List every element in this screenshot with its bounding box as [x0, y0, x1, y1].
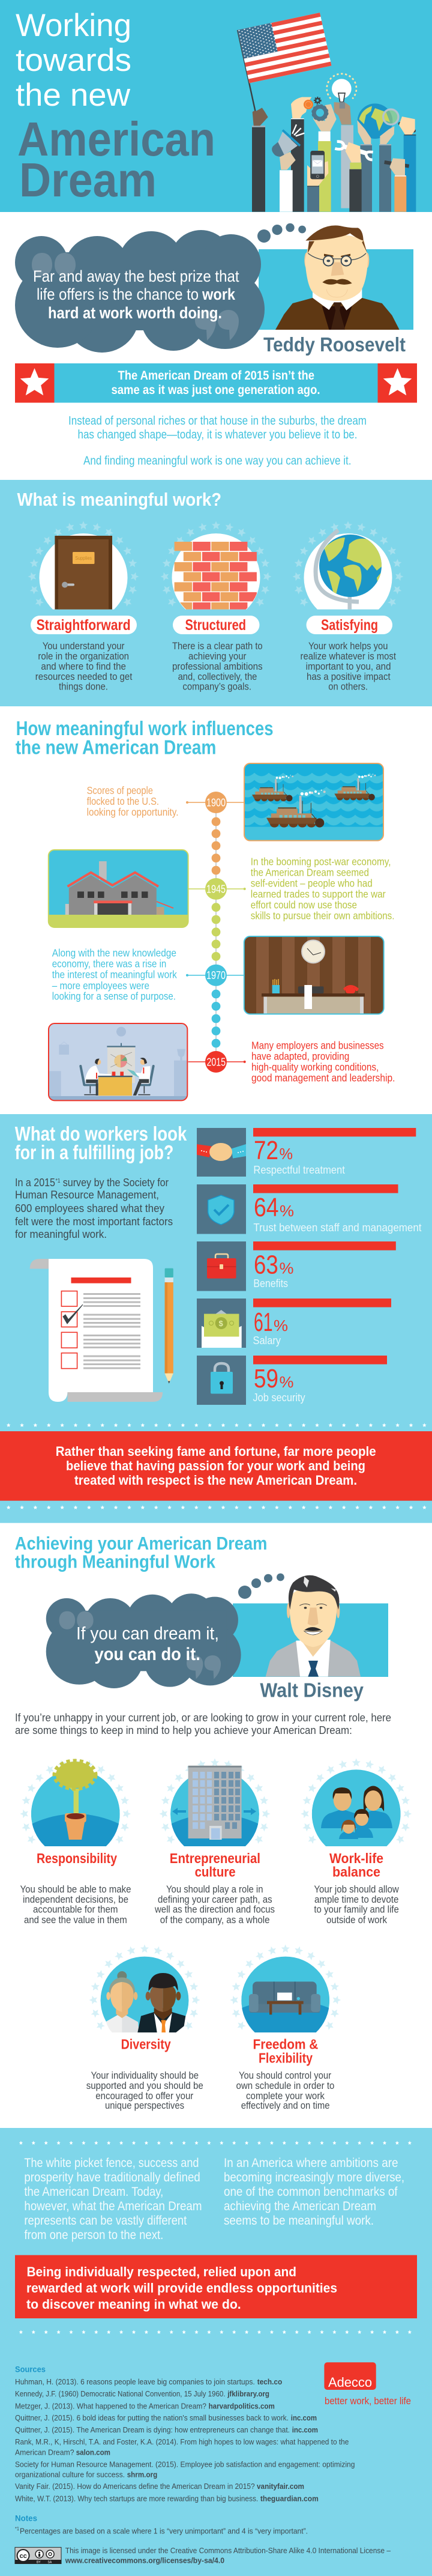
card: straightforward [28, 521, 139, 692]
card: satisfying [293, 521, 403, 692]
text: learned trades to support the war [251, 888, 386, 900]
stat: salary: 61 [254, 1308, 272, 1337]
body text: Your work helps you [308, 640, 388, 652]
label [253, 2037, 318, 2066]
text: Along with the new knowledge [52, 947, 176, 959]
badge: creative commons: SA [48, 2561, 52, 2565]
label pill: Straightforward [37, 617, 131, 634]
star ring [28, 521, 139, 608]
panel: header [0, 0, 432, 212]
icon: potted tree [31, 1759, 120, 1846]
text: left column: however, what the American Dream [24, 2199, 202, 2213]
left person [80, 1059, 111, 1096]
title: the new [16, 77, 131, 113]
label: Entrepreneurial [170, 1850, 260, 1866]
heading: through Meaningful Work [15, 1551, 216, 1572]
icon: globe [316, 530, 384, 610]
text: economy, there was a rise in [52, 958, 166, 970]
name: Walt Disney: Walt Disney [260, 1679, 364, 1701]
text: right column: one of the common benchmarks of [224, 2185, 398, 2199]
notes [15, 2513, 308, 2536]
stat: trust: Trust between staff and management [253, 1221, 421, 1234]
body text: resources needed to get [35, 671, 133, 682]
arm: wrench [335, 142, 373, 212]
body text: Your job should allow [314, 1884, 399, 1895]
arm: globe [357, 103, 398, 212]
icon: family [312, 1769, 401, 1846]
portrait: Teddy Roosevelt [275, 225, 400, 330]
body text: of the company, as a whole [160, 1915, 270, 1926]
sources: Society for Human Resource Management. (2015). Employee job satisfaction and engagement: optimizing [15, 2460, 355, 2468]
body text [300, 640, 396, 692]
notes: Notes [15, 2513, 37, 2523]
text: self-evident – people who had [251, 877, 373, 889]
stat: job security [197, 1356, 387, 1405]
text: the American Dream seemed [251, 866, 369, 878]
title: Dream [19, 153, 157, 207]
label: Responsibility [37, 1850, 117, 1866]
icon: pencil [165, 1268, 173, 1384]
stat: trust: 64 [254, 1193, 279, 1222]
body text: things done. [59, 681, 108, 692]
survey paragraph: In a 2015 [15, 1176, 55, 1189]
icon: door [55, 536, 112, 610]
dots: 1970-2015 [212, 990, 220, 1047]
sources: White, W.T. (2013). Why tech startups are more rewarding than big business. [15, 2494, 258, 2503]
license text [65, 2546, 391, 2565]
stars row top [7, 1423, 427, 1427]
intro paragraph [68, 414, 367, 467]
sources: inc.com [291, 2413, 317, 2422]
survey paragraph: survey by the Society for [63, 1176, 169, 1189]
label: Freedom & [253, 2037, 318, 2052]
body text: on others. [328, 681, 368, 692]
notes: *1 [15, 2526, 20, 2532]
sources: jfklibrary.org [227, 2389, 269, 2398]
sources: Quittner, J. (2015). 6 bold ideas for putting the nation's small businesses back to work. [15, 2413, 289, 2422]
text: right column: achieving the American Dream [224, 2199, 376, 2213]
thought bubbles [257, 223, 306, 243]
sources: salon.com [76, 2447, 110, 2456]
text: have adapted, providing [251, 1050, 349, 1062]
body text [154, 1884, 275, 1926]
sources: vanityfair.com [257, 2482, 304, 2491]
callout: new American Dream: Rather than seeking fame and fortune, far more people [56, 1444, 376, 1459]
milestone: 1945 [49, 850, 395, 927]
callout: new American Dream: treated with respect is the new American Dream. [74, 1473, 357, 1488]
body text [86, 2070, 203, 2111]
stat: job security: % [280, 1373, 294, 1391]
icon: american flag [238, 13, 331, 112]
title: American [17, 112, 215, 166]
intro paragraph: And finding meaningful work is one way you can achieve it. [83, 454, 352, 467]
illustration: meeting [49, 1023, 187, 1100]
body text: You should play a role in [166, 1884, 263, 1895]
body text: important to you, and [306, 661, 391, 672]
panel: what do workers look for [0, 1114, 432, 1523]
quote text [33, 267, 239, 322]
text [251, 1039, 395, 1083]
icon: two colleagues [101, 1957, 188, 2032]
sources: Quittner, J. (2015). The American Dream is dying: how entrepreneurs can change that. [15, 2425, 290, 2434]
sources: theguardian.com [260, 2494, 319, 2503]
stat: benefits: Benefits [253, 1277, 288, 1290]
card: freedom and flexibility [230, 1945, 341, 2111]
illustration: steamboats [244, 763, 383, 841]
milestone: 1900 [87, 763, 383, 841]
text: – more employees were [52, 980, 149, 992]
body text: You understand your [43, 640, 125, 652]
stat: respectful treatment: Respectful treatment [253, 1163, 345, 1176]
body text: realize whatever is most [300, 650, 396, 662]
sources: Rank, M.R., K, Hirschl, T.A. and Foster, K.A. (2014). From high hopes to low wages: what happened to the [15, 2437, 349, 2446]
icon: brick wall [175, 542, 257, 610]
icon: sofa and laptop [241, 1957, 330, 2032]
stat: trust [197, 1184, 421, 1234]
sources: organizational culture for success. [15, 2470, 125, 2479]
arm: flag holder [252, 108, 268, 212]
body text: There is a clear path to [172, 640, 263, 652]
body text: accountable for them [33, 1905, 118, 1915]
body text [20, 1884, 131, 1926]
label pill: Satisfying [321, 617, 378, 634]
milestone: 1970: 1970 [206, 969, 226, 981]
card: diversity [86, 1945, 203, 2111]
sources: Sources [15, 2364, 46, 2374]
stat: benefits: % [280, 1259, 294, 1277]
icon: megaphone [272, 124, 304, 157]
survey paragraph: for meaningful work. [15, 1228, 107, 1240]
panel: what is meaningful work [0, 480, 432, 706]
stat: job security: Job security [253, 1391, 305, 1404]
text: left column: the American Dream. Today, [24, 2185, 163, 2199]
text: In the booming post-war economy, [251, 856, 391, 868]
heading [15, 1123, 187, 1163]
arm: white sleeve [280, 152, 296, 212]
quote text: you can do it. [95, 1644, 200, 1664]
text: left column: represents can be vastly different [24, 2214, 187, 2228]
text: looking for opportunity. [87, 806, 179, 818]
arm: light bulb [327, 74, 356, 208]
icon: shield [208, 1195, 234, 1225]
badge: creative commons [15, 2547, 61, 2565]
icon: briefcase [207, 1254, 236, 1279]
body text: to your family and life [314, 1905, 399, 1915]
sources: Vanity Fair. (2015). How do Americans define the American Dream in 2015? [15, 2482, 255, 2491]
body text: defining your career path, as [158, 1894, 272, 1905]
body text: role in the organization [38, 650, 129, 662]
body text: ample time to devote [314, 1894, 398, 1905]
callout: respected: to discover meaning in what we do. [26, 2297, 241, 2312]
body text: complete your work [246, 2091, 325, 2102]
icon: handshake [197, 1143, 246, 1161]
text: right column [224, 2156, 404, 2228]
label: culture [195, 1864, 236, 1880]
sources: Huhman, H. (2013). 6 reasons people leave big companies to join startups. [15, 2377, 255, 2386]
quote text: work [202, 285, 236, 303]
icon: star right [378, 363, 417, 402]
card: entrepreneurial culture [154, 1759, 275, 1926]
stars row bottom [19, 2330, 412, 2334]
body text: outside of work [326, 1915, 388, 1926]
stat: benefits: 63 [254, 1250, 278, 1279]
sources: shrm.org [127, 2470, 157, 2479]
stat: respectful treatment: 72 [254, 1136, 278, 1165]
illustration: office [244, 936, 384, 1014]
arm: phone [307, 151, 328, 212]
card: structured [161, 521, 271, 692]
heading: the new American Dream [16, 736, 216, 759]
panel: achieving your American Dream [15, 1533, 412, 2111]
intro paragraph: If you’re unhappy in your current job, or are looking to grow in your current role, here [15, 1712, 391, 1724]
label: Flexibility [259, 2050, 313, 2066]
body text [172, 640, 263, 692]
heading [15, 1533, 267, 1572]
text: left column: The white picket fence, success and [24, 2156, 199, 2170]
label: Diversity [121, 2037, 171, 2052]
quote text [76, 1624, 219, 1664]
card: responsibility [20, 1759, 131, 1926]
stars row bottom [7, 1505, 427, 1509]
body text: Your individuality should be [91, 2070, 199, 2081]
label: Work-life [329, 1850, 383, 1866]
logo: Adecco: better work, better life [325, 2395, 411, 2407]
banner text: The American Dream of 2015 isn’t the [118, 369, 314, 383]
heading [16, 717, 274, 759]
body text: company’s goals. [182, 681, 251, 692]
quote text: If you can dream it, [76, 1624, 219, 1644]
stat: salary: Salary [253, 1334, 281, 1347]
portrait: Walt Disney [266, 1575, 361, 1677]
survey paragraph: Human Resource Management, [15, 1188, 159, 1201]
banner: American Dream 2015 [15, 363, 417, 402]
logo: Adecco [324, 2362, 411, 2407]
milestone: 2015: 2015 [206, 1056, 226, 1068]
stat: respectful treatment: % [280, 1145, 293, 1163]
illustration: factory [49, 850, 188, 927]
body text: and see the value in them [24, 1915, 127, 1926]
icon: office building [170, 1766, 259, 1846]
milestone: 1900: 1900 [206, 796, 226, 808]
heading: Achieving your American Dream [15, 1533, 267, 1554]
survey paragraph: felt were the most important factors [15, 1215, 173, 1228]
timeline axis [215, 802, 217, 1062]
dots: 1945-1970 [212, 903, 220, 961]
heading: What is meaningful work? [17, 489, 221, 510]
text [52, 947, 177, 1002]
callout: new American Dream [0, 1431, 432, 1501]
logo: Adecco: Adecco [328, 2375, 372, 2390]
quote text: hard at work worth doing. [48, 304, 222, 322]
text: Scores of people [87, 784, 153, 796]
text: the interest of meaningful work [52, 969, 177, 981]
text: looking for a sense of purpose. [52, 990, 176, 1002]
arm: lime sleeve and gears [313, 97, 337, 212]
stat: respectful treatment [197, 1128, 416, 1177]
sources: inc.com [292, 2425, 318, 2434]
text: Many employers and businesses [251, 1039, 384, 1051]
sources: American Dream? [15, 2447, 74, 2456]
label [170, 1850, 260, 1880]
body text: You should control your [239, 2070, 331, 2081]
text: right column: seems to be meaningful work. [224, 2214, 374, 2228]
text: effort could now use those [251, 899, 357, 911]
card: work-life balance [301, 1759, 412, 1926]
heading: How meaningful work influences [16, 717, 274, 739]
sources: tech.co [257, 2377, 282, 2386]
body text [236, 2070, 334, 2111]
text: left column: prosperity have traditionally defined [24, 2171, 200, 2184]
panel: roosevelt quote [15, 223, 413, 356]
right person [127, 1058, 154, 1096]
quote cloud [46, 1593, 241, 1688]
title: towards [16, 43, 131, 78]
label: balance [332, 1864, 380, 1880]
arm: marker [385, 158, 409, 212]
icon: checklist scroll [30, 1259, 163, 1402]
portrait background [259, 249, 413, 330]
body text [35, 640, 133, 692]
quote text: Far and away the best prize that [33, 267, 239, 285]
arm: coin [291, 97, 313, 212]
title: Working [16, 8, 131, 43]
quote text: life offers is the chance to [37, 285, 199, 303]
intro paragraph: are some things to keep in mind to help you achieve your American Dream: [15, 1724, 352, 1736]
banner text [112, 369, 320, 397]
milestone: 1970 [52, 936, 384, 1014]
body text: has a positive impact [307, 671, 391, 682]
illustration: raised hands [252, 74, 416, 212]
arm: blue sleeve [398, 117, 416, 212]
heading: for in a fulfilling job? [15, 1141, 173, 1163]
milestone: 1945: 1945 [206, 883, 226, 895]
label [329, 1850, 383, 1880]
sources: harvardpolitics.com [209, 2401, 275, 2410]
body text: You should be able to make [20, 1884, 131, 1895]
dots: 1900-1945 [212, 817, 220, 874]
icon: star left [15, 363, 54, 402]
text [87, 784, 179, 818]
portrait background [233, 1604, 388, 1677]
text [251, 856, 395, 921]
intro paragraph [15, 1712, 391, 1736]
quote cloud [15, 230, 265, 353]
text: flocked to the U.S. [87, 795, 159, 807]
thought bubbles [238, 1574, 284, 1599]
stat: trust: % [280, 1202, 294, 1220]
body text [314, 1884, 399, 1926]
sources: Kennedy, J.F. (1960) Democratic National Convention, 15 July 1960. [15, 2389, 226, 2398]
text: right column: becoming increasingly more diverse, [224, 2171, 404, 2184]
icon: money envelope: $ [218, 1319, 223, 1328]
body text: independent decisions, be [23, 1894, 128, 1905]
stat: job security: 59 [254, 1364, 278, 1393]
text: left column: from one person to the next. [24, 2228, 163, 2242]
label pill: Structured [185, 617, 246, 634]
icon: door: Supplies [75, 555, 92, 561]
stat: salary [197, 1299, 391, 1348]
body text: effectively and on time [241, 2100, 330, 2111]
body text: unique perspectives [105, 2100, 184, 2111]
text: skills to pursue their own ambitions. [251, 909, 395, 921]
icon: padlock [211, 1363, 233, 1393]
license text: www.creativecommons.org/licenses/by-sa/4.0 [65, 2556, 224, 2565]
body text: achieving your [188, 650, 247, 662]
badge: creative commons: cc [19, 2553, 27, 2560]
body text: own schedule in order to [236, 2080, 334, 2091]
text: right column: In an America where ambitions are [224, 2156, 398, 2170]
stat: salary: % [274, 1317, 288, 1335]
icon: money envelope [202, 1310, 242, 1348]
banner text: same as it was just one generation ago. [112, 383, 320, 397]
body text: well as the direction and focus [154, 1905, 275, 1915]
body text: encouraged to offer your [95, 2091, 194, 2102]
callout: new American Dream: believe that having passion for your work and being [66, 1458, 365, 1473]
survey paragraph: *1 [55, 1178, 61, 1184]
text: left column [24, 2156, 202, 2242]
survey paragraph [15, 1176, 173, 1240]
callout: respected: Being individually respected, relied upon and [26, 2264, 296, 2279]
intro paragraph: Instead of personal riches or that house in the suburbs, the dream [68, 414, 367, 428]
stat: benefits [197, 1241, 396, 1291]
callout: respected [15, 2255, 417, 2318]
body text: and where to find the [41, 661, 126, 672]
body text: supported and you should be [86, 2080, 203, 2091]
panel: timeline [16, 717, 395, 1100]
body text: professional ambitions [172, 661, 263, 672]
milestone: 2015 [49, 1023, 395, 1100]
notes: Percentages are based on a scale where 1 is “very unimportant” and 4 is “very important”. [20, 2527, 308, 2536]
body text: and, collectively, the [178, 671, 257, 682]
text: high-quality working conditions, [251, 1061, 379, 1073]
panel: conclusion and footer [0, 2128, 432, 2576]
license text: This image is licensed under the Creative Commons Attribution-Share Alike 4.0 International License – [65, 2546, 391, 2555]
text: good management and leadership. [251, 1071, 395, 1083]
callout: respected: rewarded at work will provide endless opportunities [26, 2281, 337, 2296]
intro paragraph: has changed shape—today, it is whatever you believe it to be. [78, 428, 358, 441]
name: Teddy Roosevelt: Teddy Roosevelt [263, 333, 406, 356]
survey paragraph: 600 employees shared what they [15, 1202, 165, 1214]
heading: What do workers look [15, 1123, 187, 1145]
title [16, 8, 215, 207]
stars row top [19, 2141, 412, 2145]
sources: Metzger, J. (2013). What happened to the American Dream? [15, 2401, 206, 2410]
badge: creative commons: BY [37, 2561, 41, 2565]
sources [15, 2364, 355, 2503]
